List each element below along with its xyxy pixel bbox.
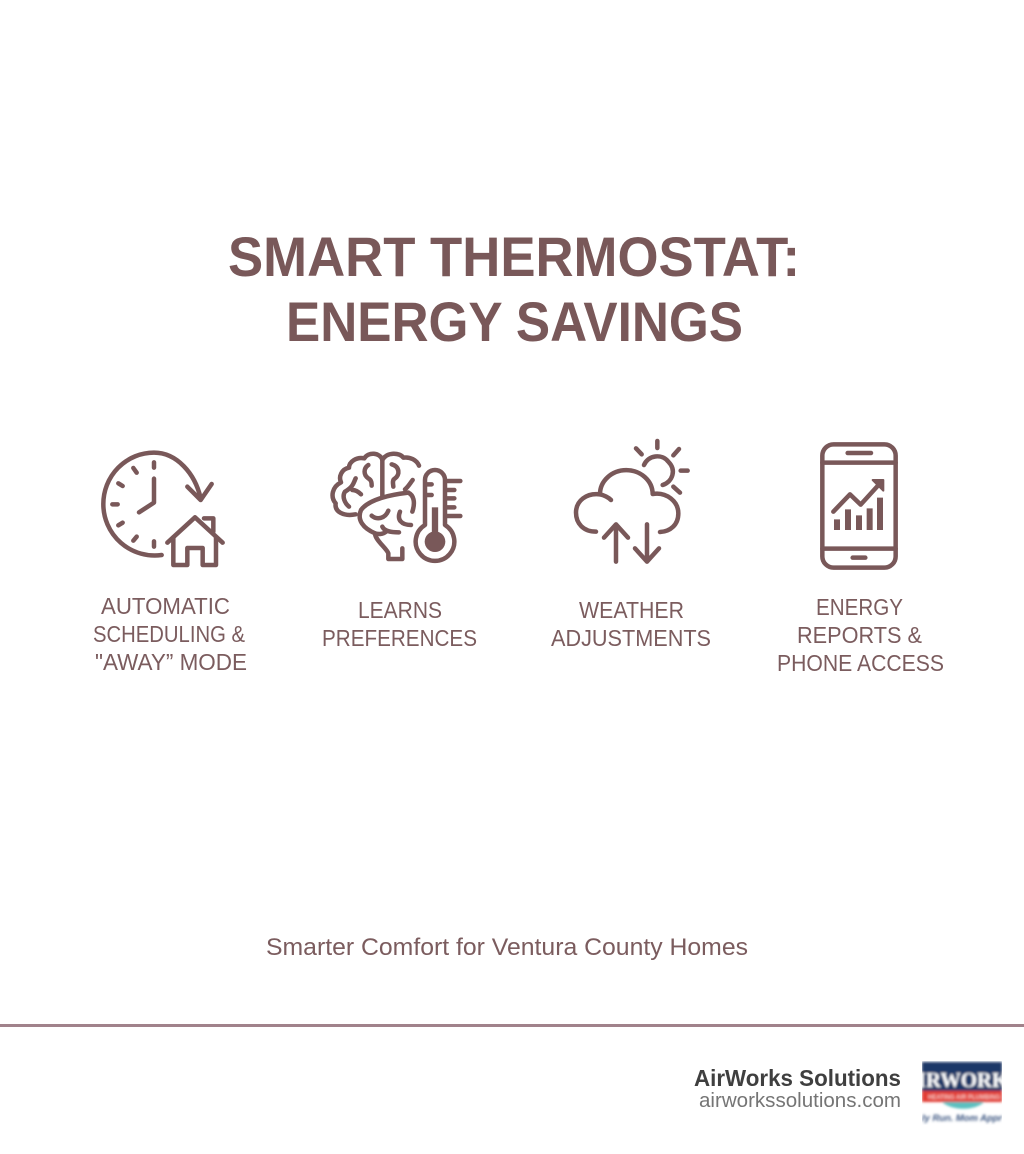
- footer brand name: AirWorks Solutions: [694, 1065, 901, 1091]
- label: weather adjustments: [551, 597, 711, 651]
- label: automatic scheduling: [93, 593, 247, 675]
- tagline: Smarter Comfort for Ventura County Homes: [266, 934, 748, 961]
- logo: HEATING AIR PLUMBING: [928, 1095, 1000, 1101]
- logo: IRWORK: [918, 1068, 1009, 1092]
- label: automatic scheduling: "AWAY” MODE: [95, 649, 247, 675]
- icon: clock and house: [103, 453, 223, 565]
- footer rule: [0, 1024, 1024, 1027]
- title: [228, 225, 800, 353]
- label: learns preferences: [322, 597, 477, 651]
- label: automatic scheduling: SCHEDULING &: [93, 621, 245, 647]
- footer website: airworkssolutions.com: [699, 1090, 901, 1112]
- logo: [918, 1062, 1009, 1123]
- label: energy reports: [777, 594, 944, 676]
- icon: cloud, sun and arrows: [576, 441, 688, 562]
- label: energy reports: PHONE ACCESS: [777, 650, 944, 676]
- label: energy reports: ENERGY: [816, 594, 903, 620]
- label: automatic scheduling: AUTOMATIC: [101, 593, 230, 619]
- label: learns preferences: PREFERENCES: [322, 625, 477, 651]
- label: weather adjustments: WEATHER: [579, 597, 684, 623]
- title: SMART THERMOSTAT:: [228, 225, 800, 288]
- title: ENERGY SAVINGS: [286, 290, 743, 353]
- label: weather adjustments: ADJUSTMENTS: [551, 625, 711, 651]
- label: energy reports: REPORTS &: [797, 622, 922, 648]
- label: learns preferences: LEARNS: [358, 597, 442, 623]
- icon: brain and thermometer: [333, 454, 460, 561]
- icon: phone with growth chart: [822, 444, 896, 568]
- logo: ly Run. Mom Appr: [922, 1113, 1003, 1123]
